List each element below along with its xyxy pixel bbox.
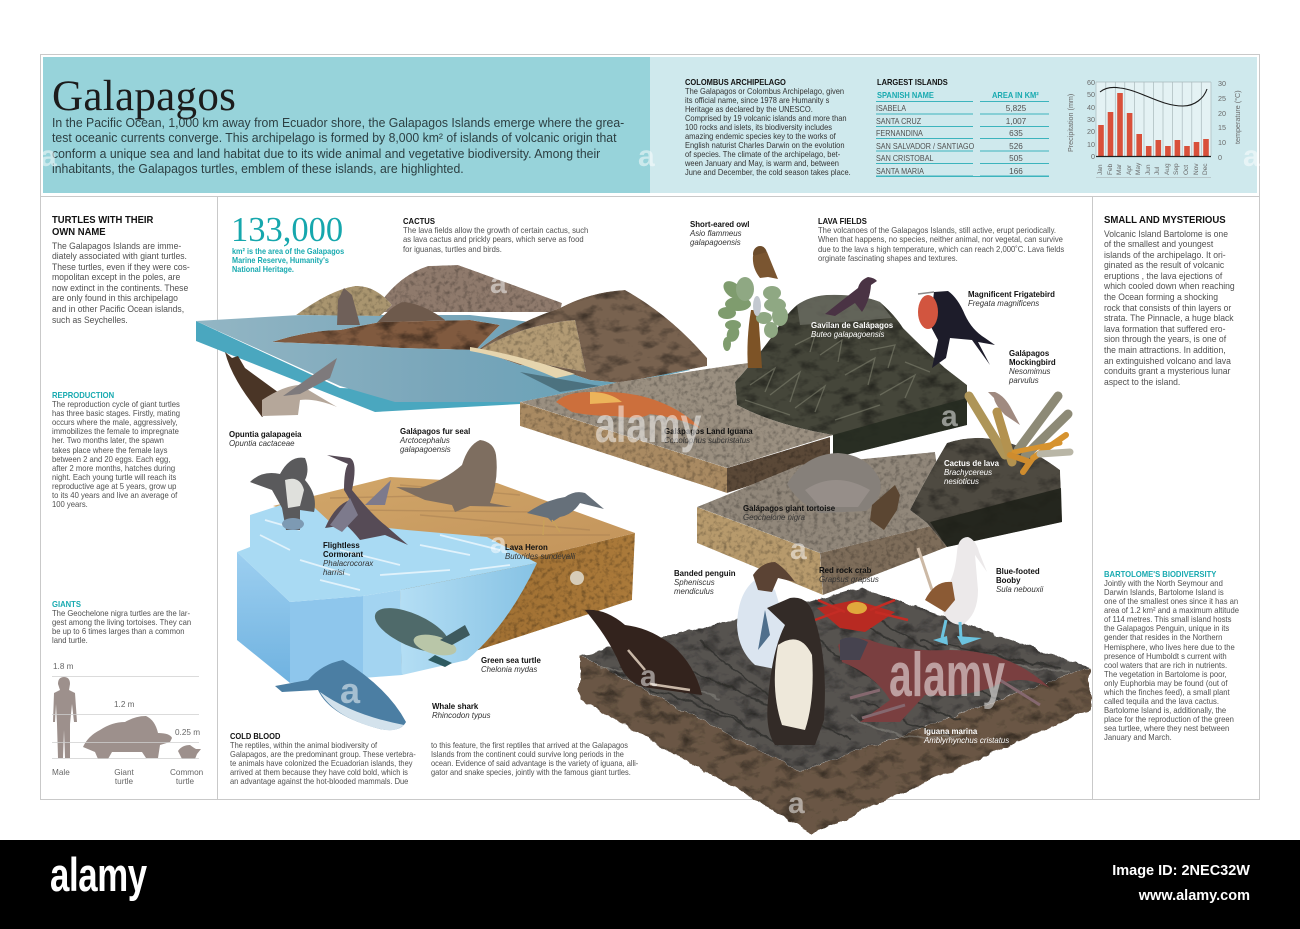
text: giants: gest among the living tortoises. They can	[52, 617, 191, 627]
stat caption: km² is the area of the Galapagos	[232, 246, 344, 256]
chart axis labels: Precipitation (mm)	[1066, 94, 1075, 152]
text: reproduction: occurs where the male, aggressively,	[52, 417, 178, 427]
table: largest islands	[876, 78, 1049, 177]
text: reproduction	[52, 390, 180, 509]
label: flightless cormorant: harrisi	[323, 568, 344, 577]
text: cold blood: arrived at them because they have cold bold, which is	[230, 767, 408, 777]
text: small and mysterious body: conduits grant a mysterious lunar	[1104, 365, 1230, 376]
text: reproduction: reproductive age at 5 years, grow up	[52, 481, 176, 491]
text: small and mysterious body: lava formation that suffered ero-	[1104, 323, 1225, 334]
chart axis labels: Nov	[1192, 163, 1200, 175]
label: galapagos mockingbird	[1008, 348, 1056, 385]
sand and water block	[237, 477, 635, 683]
size labels: turtle	[115, 777, 133, 786]
text: turtles body: such as Seychelles.	[52, 314, 128, 325]
title: Galapagos	[52, 73, 236, 120]
table: largest islands: 526	[1009, 142, 1023, 150]
text: reproduction: The reproduction cycle of giant turtles	[52, 399, 180, 409]
text: Colombus Archipelago: COLOMBUS ARCHIPELAGO	[685, 78, 786, 87]
watermark marks: a	[40, 140, 57, 173]
label: green sea turtle: Green sea turtle	[481, 656, 541, 664]
icon: opuntia cactus tree	[718, 277, 788, 368]
text: cold blood: Galapagos, are the predominant group. These vertebra-	[230, 749, 416, 759]
header panel: teal introduction	[43, 57, 650, 193]
label: red rock crab: Red rock crab	[819, 566, 871, 574]
size comparison silhouettes	[53, 677, 201, 759]
text: turtles body: diately associated with giant turtles.	[52, 250, 187, 261]
size labels: Male	[52, 768, 70, 777]
stat caption	[232, 246, 344, 274]
table: largest islands: 166	[1009, 166, 1023, 176]
label: giant tortoise: Galápagos giant tortoise	[743, 504, 835, 512]
chart axis labels: temperature (°C)	[1233, 90, 1242, 144]
text: Colombus Archipelago: amazing endemic species key to the works of	[685, 132, 836, 141]
table: largest islands: 5,825	[1006, 104, 1026, 113]
credit logo: alamy	[50, 848, 147, 901]
watermark marks: alamy	[595, 397, 701, 453]
text: cactus	[403, 216, 588, 254]
label: opuntia: Opuntia cactaceae	[229, 439, 295, 448]
text: reproduction: her. Two months later, the spawn	[52, 435, 164, 445]
text: giants	[52, 598, 191, 645]
chart axis labels: 0	[1091, 152, 1095, 161]
icon: blue-footed cormorant	[250, 458, 315, 530]
text: Bartolome's biodiversity: gender that resides in the Northern	[1104, 632, 1222, 642]
text: Bartolome's biodiversity: sea turtlee, where they nest between	[1104, 723, 1229, 733]
table: largest islands: ISABELA	[876, 104, 906, 113]
text: Colombus Archipelago: its official name, since 1978 are Humanity s	[685, 96, 829, 105]
chart axis labels: Jun	[1145, 165, 1152, 175]
label: fur seal: Arctocephalus	[400, 436, 450, 445]
icon: magnificent frigatebird	[918, 291, 995, 368]
label: marine iguana: Amblyrhynchus cristatus	[924, 736, 1009, 745]
text: turtles body: and in other Pacific Ocean islands,	[52, 303, 184, 314]
text: small and mysterious body: aspect to the island.	[1104, 376, 1180, 387]
size labels	[52, 662, 203, 786]
text: cold blood continued: to this feature, the first reptiles that arrived at the Galapagos	[431, 740, 628, 750]
label: lava heron: Lava Heron	[505, 542, 548, 552]
label: land iguana: Conolophus subcristatus	[664, 436, 750, 445]
text: small and mysterious body: eruptions , the lava ejections of	[1104, 270, 1222, 281]
intro text	[52, 116, 624, 176]
label: short-eared owl: galapagoensis	[690, 238, 741, 247]
tortoise slab with second lava mound	[697, 438, 1062, 595]
label: blue-footed booby: Blue-footed	[996, 566, 1040, 576]
table: largest islands: AREA IN KM²	[992, 91, 1039, 100]
text: Bartolome's biodiversity: called tequila and the lava cactus.	[1104, 696, 1219, 706]
text: Colombus Archipelago: 100 rocks and islets, its biodiversity includes	[685, 123, 832, 132]
credit text	[1112, 863, 1250, 904]
watermark marks: a	[490, 267, 507, 300]
text: Colombus Archipelago: The Galapagos or Colombus Archipelago, given	[685, 87, 844, 96]
bottom credit bar	[0, 840, 1300, 929]
icon: green sea turtle	[369, 599, 470, 667]
table: largest islands: FERNANDINA	[876, 129, 923, 138]
watermark marks: a	[490, 527, 507, 560]
text: small and mysterious body: the Ocean forming a shocking	[1104, 291, 1218, 302]
table: largest islands: 635	[1009, 129, 1023, 138]
text: cold blood	[230, 730, 416, 786]
label: flightless cormorant: Cormorant	[323, 550, 363, 559]
chart axis labels: Mar	[1116, 164, 1123, 175]
chart axis labels: 30	[1218, 79, 1226, 88]
size labels: 1.8 m	[53, 662, 73, 671]
text: Colombus Archipelago: English naturist Charles Darwin on the evolution	[685, 141, 844, 150]
text: Bartolome's biodiversity: The vegetation in Bartolome is poor,	[1104, 669, 1227, 679]
label: lava heron: Butorides sundevalli	[505, 552, 575, 561]
icon: left penguin	[585, 610, 702, 695]
text: Bartolome's biodiversity: Darwin Islands, Bartolome Island is	[1104, 587, 1224, 597]
text: cold blood continued	[431, 740, 638, 777]
chart axis labels: 50	[1087, 90, 1095, 99]
icon: banded penguin, back	[737, 562, 795, 670]
label: giant tortoise: Geochelone nigra	[743, 513, 805, 522]
label: galapagos mockingbird: Galápagos	[1009, 348, 1049, 358]
watermark marks: a	[340, 670, 360, 711]
label: blue-footed booby	[996, 566, 1044, 594]
chart axis labels: Apr	[1126, 165, 1133, 175]
text: cold blood: te animals have colonized the Ecuadorian islands, they	[230, 758, 413, 768]
label: red rock crab: Grapsus grapsus	[819, 575, 879, 584]
text: Colombus Archipelago: ween January and May, is warm and, between	[685, 159, 839, 168]
chart axis labels: 10	[1087, 140, 1095, 149]
text: small and mysterious body: strata. The Pinnacle, a huge black	[1104, 312, 1234, 323]
label: fur seal	[400, 426, 470, 454]
text: Colombus Archipelago: Heritage as declared by the UNESCO.	[685, 105, 813, 114]
table: largest islands: SAN SALVADOR / SANTIAGO	[876, 142, 974, 150]
text: reproduction: immobilizes the female to impregnate	[52, 426, 179, 436]
icon: land iguana	[556, 392, 700, 428]
label: flightless cormorant: Flightless	[323, 540, 360, 550]
icon: hawk	[825, 277, 877, 316]
label: galapagos mockingbird: Nesomimus	[1009, 367, 1051, 376]
label: land iguana	[664, 426, 753, 445]
label: fur seal: galapagoensis	[400, 445, 451, 454]
watermark marks: a	[788, 787, 805, 820]
icon: pelican	[225, 352, 337, 417]
label: marine iguana	[924, 726, 1009, 745]
chart axis labels: 10	[1218, 138, 1226, 147]
label: magnificent frigatebird: Fregata magnificens	[968, 299, 1039, 308]
label: blue-footed booby: Booby	[996, 576, 1020, 585]
text: turtles body: now extinct in the continents. These	[52, 282, 188, 293]
label: whale shark: Whale shark	[432, 702, 478, 710]
label: land iguana: Galápagos Land Iguana	[664, 426, 753, 436]
icon: blue-footed booby	[918, 537, 987, 645]
text: small and mysterious body: the main attractions. In addition,	[1104, 344, 1226, 355]
text: reproduction: after 2 more months, hatches during	[52, 463, 175, 473]
text: reproduction: between 2 and 20 eggs. Each egg,	[52, 454, 170, 464]
watermark marks: a	[790, 533, 807, 566]
chart axis labels: 60	[1087, 78, 1095, 87]
chart axis labels: Sep	[1173, 163, 1180, 175]
icon: marine iguana	[838, 637, 1050, 722]
label: flightless cormorant	[323, 540, 374, 577]
chart axis labels: 0	[1218, 153, 1222, 162]
page frame	[40, 54, 1260, 800]
icon: lava cactus	[969, 396, 1070, 472]
stat: 133,000: 133,000	[231, 211, 343, 249]
label: magnificent frigatebird: Magnificent Frigatebird	[968, 290, 1055, 298]
intro text: In the Pacific Ocean, 1,000 km away from Ecuador shore, the Galapagos Islands emerge where the grea-	[52, 116, 624, 130]
text: cold blood: The reptiles, within the animal biodiversity of	[230, 740, 377, 750]
label: marine iguana: Iguana marina	[924, 726, 977, 736]
size labels: Common	[170, 768, 203, 777]
stat caption: National Heritage.	[232, 264, 294, 274]
text: Colombus Archipelago: June and December, the cold season takes place.	[685, 168, 851, 177]
text: lava fields: When that happens, no species, neither animal, nor vegetal, can survive	[818, 234, 1063, 244]
label: galapagos hawk	[811, 320, 893, 339]
label: lava cactus	[944, 458, 1000, 486]
icon: red rock crab	[815, 600, 908, 632]
watermark marks: alamy	[889, 641, 1005, 710]
icon: giant tortoise	[787, 453, 900, 530]
text: giants: be up to 6 times larges than a common	[52, 626, 184, 636]
text: Bartolome's biodiversity: January and March.	[1104, 732, 1172, 742]
text: small and mysterious body: Volcanic Island Bartolome is one	[1104, 228, 1228, 238]
text: small and mysterious body	[1104, 228, 1235, 387]
label: lava cactus: Cactus de lava	[944, 458, 999, 468]
text: Bartolome's biodiversity: only Euphorbia may be found (out of	[1104, 678, 1228, 688]
text: Colombus Archipelago	[685, 78, 851, 177]
text: lava fields: LAVA FIELDS	[818, 216, 867, 226]
chart axis labels: Oct	[1183, 165, 1190, 175]
text: small and mysterious body: sion through the years, is one of	[1104, 333, 1226, 344]
label: galapagos mockingbird: parvulus	[1009, 376, 1039, 385]
chart axis labels: Dec	[1202, 163, 1209, 175]
watermark marks: a	[638, 140, 655, 173]
text: turtles with their own name: OWN NAME	[52, 227, 106, 238]
table: largest islands: 1,007	[1006, 116, 1026, 126]
text: reproduction: takes place where the female lays	[52, 445, 167, 455]
chart axis labels: Jan	[1097, 165, 1104, 175]
text: Bartolome's biodiversity: Bartolome Island is, additionally, the	[1104, 705, 1226, 715]
label: galapagos hawk: Buteo galapagoensis	[811, 330, 884, 339]
label: banded penguin: Banded penguin	[674, 568, 736, 578]
icon: whale shark	[275, 660, 406, 730]
label: galapagos mockingbird: Mockingbird	[1009, 358, 1056, 367]
label: giant tortoise	[743, 504, 835, 522]
text: cactus: as lava cactus and prickly pears, which serve as food	[403, 234, 584, 244]
credit text: www.alamy.com	[1139, 888, 1250, 904]
table: largest islands: SAN CRISTOBAL	[876, 154, 934, 163]
label: green sea turtle: Chelonia mydas	[481, 665, 537, 674]
icon: flightless cormorant	[325, 455, 408, 545]
chart axis labels: 15	[1218, 123, 1226, 132]
text: reproduction: 100 years.	[52, 499, 88, 509]
label: lava cactus: nesioticus	[944, 477, 979, 486]
chart axis labels	[1066, 78, 1242, 175]
text: small and mysterious body: of the smallest and youngest	[1104, 238, 1213, 249]
text: turtles body: These turtles, even if they were cos-	[52, 261, 190, 272]
chart axis labels: Jul	[1154, 167, 1161, 175]
chart: precipitation and temperature	[1096, 82, 1211, 178]
chart axis labels: Feb	[1106, 164, 1114, 175]
text: turtles with their own name: TURTLES WITH THEIR	[52, 215, 153, 226]
text: giants: land turtle.	[52, 635, 88, 645]
text: cold blood continued: ocean. Evidence of said advantage is the variety of iguana, alli-	[431, 758, 638, 768]
chart axis labels: 20	[1087, 127, 1095, 136]
intro text: inhabitants, the Galapagos turtles, emblem of these islands, are highlighted.	[52, 162, 464, 176]
text: Bartolome's biodiversity: presence of Humboldt s current with	[1104, 651, 1227, 661]
chart axis labels: 30	[1087, 115, 1095, 124]
text: reproduction: REPRODUCTION	[52, 390, 114, 400]
text: reproduction: to its 40 years and live an average of	[52, 490, 177, 500]
text: cold blood: an advantage against the hot-blooded mammals. Due	[230, 776, 408, 786]
text: reproduction: has three basic stages. Firstly, mating	[52, 408, 180, 418]
label: flightless cormorant: Phalacrocorax	[323, 559, 373, 568]
text: turtles with their own name	[52, 215, 154, 238]
text: Bartolome's biodiversity: cool waters that are rich in nutrients.	[1104, 660, 1227, 670]
intro text: conform a unique sea and land habitat due to its wide animal and vegetative biodiversity. Among their	[52, 147, 600, 161]
icon: galapagos fur seal	[396, 440, 512, 512]
size labels: Giant	[114, 768, 134, 777]
land iguana slab with lava volcano	[520, 295, 968, 493]
label: whale shark	[432, 702, 491, 720]
island landscape with sea	[196, 265, 707, 412]
text: Bartolome's biodiversity: place for the reproduction of the green	[1104, 714, 1234, 724]
label: short-eared owl: Short-eared owl	[690, 220, 749, 228]
text: Bartolome's biodiversity	[1104, 569, 1239, 742]
label: fur seal: Galápagos fur seal	[400, 426, 470, 436]
text: lava fields	[818, 216, 1064, 263]
table: largest islands: SANTA MARIA	[876, 166, 924, 176]
text: lava fields: The volcanoes of the Galapagos Islands, still active, erupt periodically.	[818, 225, 1056, 235]
text: turtles body	[52, 240, 190, 325]
table: largest islands: 505	[1009, 154, 1023, 163]
text: lava fields: due to the lava s high temperature, which can reach 2,000˚C. Lava fields	[818, 244, 1064, 254]
label: blue-footed booby: Sula nebouxii	[996, 585, 1043, 594]
text: small and mysterious body: an extinguished volcano and lava	[1104, 355, 1231, 366]
watermark marks: a	[941, 400, 958, 433]
text: Bartolome's biodiversity: which the finches feed), a small plant	[1104, 687, 1230, 697]
watermark marks: a	[640, 660, 657, 693]
chart axis labels: May	[1135, 163, 1142, 175]
label: opuntia	[229, 430, 302, 448]
icon: banded penguin, front	[767, 598, 825, 745]
label: lava heron	[505, 542, 576, 561]
text: small and mysterious body: which cooled down when reaching	[1104, 280, 1235, 291]
label: banded penguin: Spheniscus	[674, 578, 715, 587]
header panel: archipelago data	[650, 57, 1257, 193]
text: Bartolome's biodiversity: Hemisphere, who lives here due to the	[1104, 642, 1235, 652]
label: opuntia: Opuntia galapageia	[229, 430, 302, 438]
table: largest islands: SPANISH NAME	[877, 91, 934, 100]
label: red rock crab	[819, 566, 879, 584]
text: giants: GIANTS	[52, 598, 81, 608]
text: turtles body: mopolitan except in the poles, are	[52, 271, 180, 282]
text: cold blood continued: gator and snake species, jointly with the famous giant turtles.	[431, 767, 631, 777]
icon: lava heron	[527, 492, 604, 535]
watermark marks: a	[1243, 140, 1260, 173]
text: small and mysterious body: rock that consists of thin layers or	[1104, 302, 1231, 313]
size labels: turtle	[176, 777, 194, 786]
text: Bartolome's biodiversity: area of 1.2 km² and a maximum altitude	[1104, 605, 1239, 615]
text: Bartolome's biodiversity: the Galapagos Penguin, unique in its	[1104, 623, 1229, 633]
text: turtles body: The Galapagos Islands are imme-	[52, 240, 181, 250]
text: cold blood: COLD BLOOD	[230, 730, 280, 740]
text: small and mysterious: SMALL AND MYSTERIOUS	[1104, 215, 1226, 226]
label: green sea turtle	[481, 656, 541, 674]
lava slab	[580, 588, 1090, 833]
text: lava fields: orginate fascinating shapes and textures.	[818, 253, 958, 263]
text: reproduction: night. Each young turtle will reach its	[52, 472, 176, 482]
label: magnificent frigatebird	[968, 290, 1055, 308]
label: short-eared owl: Asio flammeus	[690, 229, 742, 238]
table: largest islands: SANTA CRUZ	[876, 116, 921, 126]
table: largest islands: LARGEST ISLANDS	[877, 78, 948, 87]
text: cactus: CACTUS	[403, 216, 435, 226]
icon: mockingbird	[988, 392, 1020, 425]
intro text: test oceanic currents converge. This archipelago is formed by 8,000 km² of islands of volcanic origin that	[52, 131, 617, 145]
text: cactus: The lava fields allow the growth of certain cactus, such	[403, 225, 588, 235]
label: lava cactus: Brachycereus	[944, 468, 992, 477]
text: Bartolome's biodiversity: Jointly with the North Seymour and	[1104, 578, 1223, 588]
chart axis labels: Aug	[1164, 163, 1171, 175]
stat caption: Marine Reserve, Humanity's	[232, 255, 329, 265]
chart axis labels: 40	[1087, 103, 1095, 112]
precipitation bars	[1098, 93, 1209, 156]
text: small and mysterious body: islands of the archipelago. It ori-	[1104, 249, 1226, 260]
label: whale shark: Rhincodon typus	[432, 711, 491, 720]
text: Colombus Archipelago: of species. The climate of the archipelago, bet-	[685, 150, 840, 159]
text: Bartolome's biodiversity: BARTOLOME'S BIODIVERSITY	[1104, 569, 1216, 579]
text: Colombus Archipelago: Comprised by 19 volcanic islands and more than	[685, 114, 847, 123]
icon: short-eared owl	[753, 246, 778, 279]
size labels: 1.2 m	[114, 700, 134, 709]
chart axis labels: 25	[1218, 94, 1226, 103]
text: Bartolome's biodiversity: one of the smallest ones since it has an	[1104, 596, 1238, 606]
text: small and mysterious body: ginated as the result of volcanic	[1104, 259, 1224, 270]
text: cold blood continued: Islands from the continent could survive long periods in the	[431, 749, 624, 759]
text: Bartolome's biodiversity: of 114 metres. This small island hosts	[1104, 614, 1231, 624]
label: galapagos hawk: Gavilan de Galápagos	[811, 320, 893, 330]
credit text: Image ID: 2NEC32W	[1112, 863, 1250, 879]
chart axis labels: 20	[1218, 109, 1226, 118]
label: banded penguin: mendiculus	[674, 587, 714, 596]
text: turtles body: are only found in this archipelago	[52, 292, 178, 303]
text: giants: The Geochelone nigra turtles are the lar-	[52, 608, 190, 618]
text: cactus: for iguanas, turtles and birds.	[403, 244, 502, 254]
label: short-eared owl	[690, 220, 749, 247]
temperature curve	[1100, 87, 1207, 106]
size labels: 0.25 m	[175, 728, 200, 737]
label: banded penguin	[674, 568, 736, 596]
